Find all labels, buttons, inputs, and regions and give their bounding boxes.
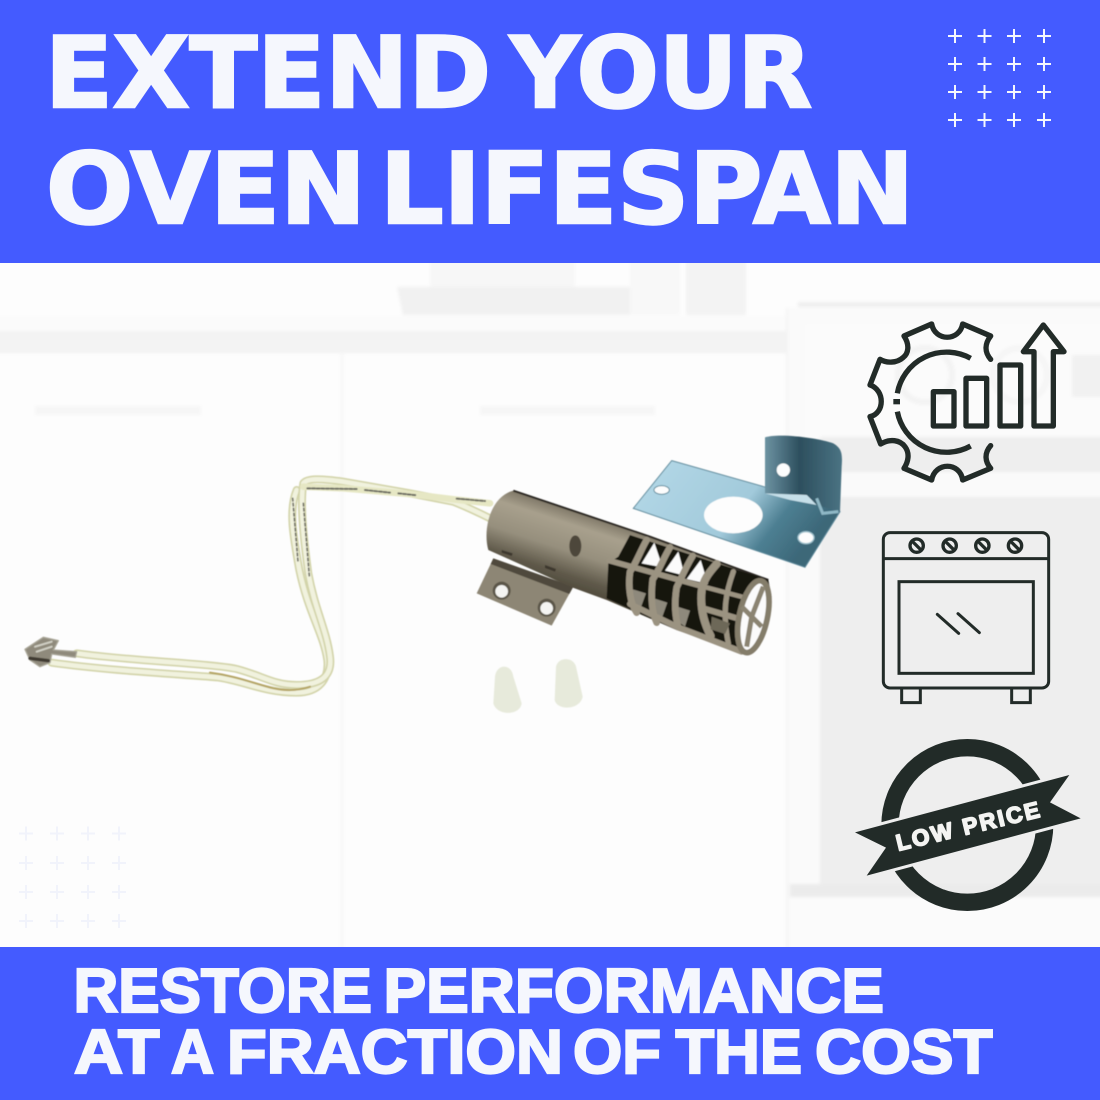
footer tagline: A: [171, 1018, 214, 1087]
title: LIFESPAN: [380, 133, 914, 247]
cage rails and rings: [609, 540, 760, 652]
title: OVEN: [46, 133, 366, 247]
footer tagline: FRACTION: [227, 1018, 563, 1087]
footer tagline: RESTORE: [74, 957, 372, 1026]
footer tagline: AT: [74, 1018, 160, 1087]
kitchen background photo: [0, 250, 1100, 977]
icon: gear with rising bars: [870, 324, 1064, 480]
icon: low price badge: [855, 748, 1081, 902]
title: YOUR: [509, 17, 812, 131]
faint plus pattern: [19, 826, 126, 928]
footer tagline: OF: [573, 1018, 661, 1087]
product: ignitor cylinder: [477, 491, 775, 655]
footer tagline: THE: [676, 1018, 802, 1087]
footer tagline: [74, 957, 993, 1087]
footer band: [0, 947, 1100, 1100]
product: bracket: [633, 436, 842, 567]
header band: [0, 0, 1100, 263]
footer tagline: PERFORMANCE: [384, 957, 884, 1026]
grey inner tube: [633, 589, 690, 627]
product: ignitor wire: [25, 479, 490, 693]
icon: oven: [883, 533, 1049, 703]
product: wire nuts: [493, 659, 583, 713]
icon: low price badge: LOW PRICE: [893, 796, 1042, 856]
title: EXTEND: [45, 17, 491, 131]
footer tagline: COST: [815, 1018, 993, 1087]
plus pattern: [948, 29, 1051, 127]
title: [45, 17, 914, 247]
cage openings: [607, 535, 772, 653]
white see-through triangles: [642, 543, 708, 584]
